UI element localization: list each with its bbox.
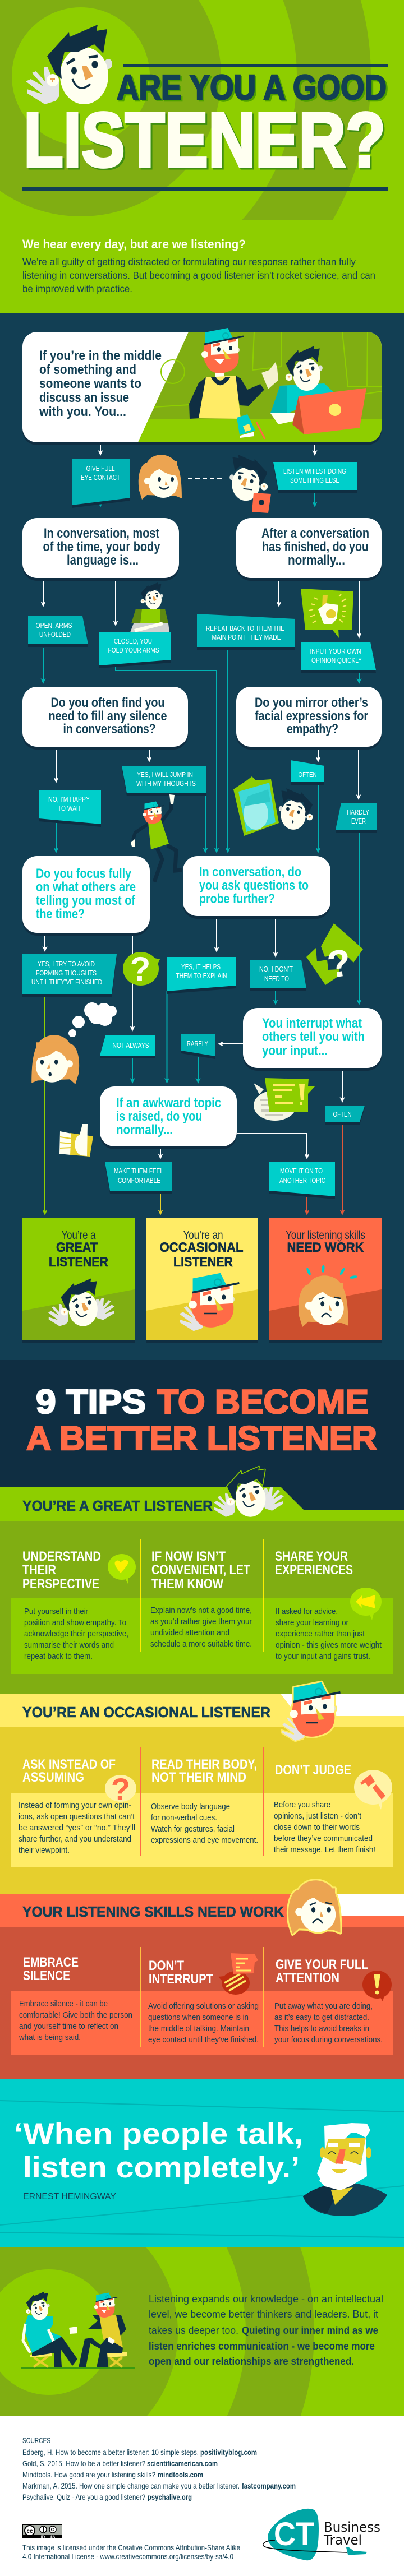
badge: creative commons <box>22 2525 62 2539</box>
tip: don't interrupt: questions when someone is in <box>148 2013 249 2022</box>
icon: interrupting speech bubbles <box>218 1953 258 1995</box>
card: interrupt question <box>243 1008 382 1068</box>
answer: closed, you fold your arms <box>99 632 171 665</box>
tip: ask instead of assuming: ions, ask open questions that can’t <box>19 1812 135 1821</box>
section: sources: Gold, S. 2015. How to be a better listener? <box>22 2459 145 2468</box>
section: sources <box>0 2416 404 2576</box>
card: ask questions to probe: you ask questions to <box>199 878 309 893</box>
section: quote <box>0 2079 404 2247</box>
tip: if now isn't convenient: as you’d rather give them your <box>150 1617 252 1626</box>
answer: not always: NOT ALWAYS <box>112 1041 149 1049</box>
tip: read their body: READ THEIR BODY, <box>152 1757 257 1772</box>
illustration: thinking woman with cloud <box>31 1002 117 1084</box>
tip: understand their perspective: acknowledge their perspective, <box>24 1630 128 1639</box>
illustration: bearded man raising hand <box>131 794 182 882</box>
question text: of something and <box>39 362 136 377</box>
card: body language question: In conversation, most <box>44 526 159 541</box>
icon: question bubble <box>105 1772 136 1807</box>
tip: give your full attention: your focus during conversations. <box>274 2036 383 2045</box>
answer: not always <box>100 1035 155 1056</box>
tip: understand their perspective: Put yourself in their <box>24 1607 88 1616</box>
result card: need work: Your listening skills <box>286 1229 365 1242</box>
section: tips heading: TO BECOME <box>157 1383 369 1421</box>
answer: no, I don't need to: NO, I DON’T <box>259 965 293 973</box>
man seated <box>23 2291 77 2367</box>
card: awkward topic question: normally... <box>116 1122 173 1137</box>
answer: rarely: RARELY <box>187 1039 208 1048</box>
answer: move it on to another topic <box>269 1162 335 1196</box>
closing text: level, we become better thinkers and leaders. But, it <box>149 2309 378 2320</box>
tip: if now isn't convenient: undivided attention and <box>150 1629 229 1638</box>
closing text: open and our relationships are strengthened. <box>149 2356 354 2367</box>
answer: input your own opinion <box>301 642 376 670</box>
intro text: We’re all guilty of getting distracted or formulating our response rather than fully <box>22 256 356 267</box>
answer: closed, you fold your arms: FOLD YOUR ARMS <box>108 646 159 654</box>
answer: yes, I will jump in: YES, I WILL JUMP IN <box>137 770 193 779</box>
tip: share your experiences: If asked for advice, <box>276 1607 338 1616</box>
card: focus fully question <box>22 856 150 933</box>
tip: don't interrupt: the middle of talking. Maintain <box>148 2024 249 2033</box>
icon: worried woman outlined <box>288 1880 341 1934</box>
icon: pointing hand speech bubble <box>301 589 354 638</box>
card: body language question: language is... <box>67 553 139 568</box>
question text <box>39 348 162 419</box>
card: interrupt question: your input... <box>262 1043 328 1058</box>
tip: embrace silence: EMBRACE <box>23 1955 79 1970</box>
tip: don't judge: opinions, just listen - don’t <box>274 1812 361 1821</box>
tip: share your experiences: experience rather than just <box>276 1630 365 1639</box>
card: focus fully question: the time? <box>36 907 85 922</box>
answer: open, arms unfolded <box>28 616 88 644</box>
tip: read their body <box>151 1757 258 1845</box>
answer: move it on to another topic: ANOTHER TOPIC <box>279 1176 325 1185</box>
card: after a conversation question: has finished, do you <box>262 539 369 554</box>
tip: read their body: Watch for gestures, facial <box>151 1825 235 1834</box>
tip: share your experiences <box>275 1549 382 1661</box>
answer: open, arms unfolded: UNFOLDED <box>39 630 71 639</box>
card: mirror expressions question <box>236 687 382 747</box>
section: needs work tips <box>0 1880 404 2079</box>
person: bearded man <box>189 328 278 419</box>
tip: ask instead of assuming: Instead of forming your own opin- <box>19 1801 131 1810</box>
closing text: takes us deeper too. <box>149 2325 238 2336</box>
icon: question bubble: ? <box>111 1772 130 1807</box>
section: sources: scientificamerican.com <box>147 2459 218 2468</box>
tip: if now isn't convenient <box>150 1549 252 1649</box>
badge: creative commons: cc <box>26 2528 33 2535</box>
answer: yes, it helps <box>167 957 236 991</box>
answer: open, arms unfolded: OPEN, ARMS <box>36 621 72 630</box>
answer: repeat back: MAIN POINT THEY MADE <box>212 633 281 641</box>
answer: yes, I try to avoid: UNTIL THEY’VE FINISHED <box>31 978 102 986</box>
card: interrupt question: You interrupt what <box>262 1016 362 1031</box>
answer: yes, I will jump in: WITH MY THOUGHTS <box>136 779 196 788</box>
tip: don't interrupt: eye contact until they’ve finished. <box>148 2036 259 2045</box>
tip: give your full attention: GIVE YOUR FULL <box>276 1957 368 1972</box>
answer: listen whilst doing something else <box>273 462 357 490</box>
bearded man seated <box>69 2292 127 2367</box>
icon: bearded man outlined <box>281 1682 340 1741</box>
answer: input your own opinion: OPINION QUICKLY <box>311 656 362 664</box>
result card: occasional listener: OCCASIONAL <box>159 1240 244 1255</box>
icon: question mark bubble <box>123 950 160 988</box>
answer: no, I don't need to <box>250 960 306 988</box>
card: interrupt question: others tell you with <box>262 1029 365 1044</box>
question text: discuss an issue <box>39 390 129 405</box>
logo: CT Business Travel <box>263 2509 380 2560</box>
badge: creative commons: SA <box>50 2536 56 2539</box>
answer: give full eye contact: EYE CONTACT <box>81 473 120 482</box>
tip: give your full attention: ATTENTION <box>276 1971 339 1986</box>
logo: CT Business Travel: Travel <box>323 2532 362 2548</box>
icon: scattered question mark <box>306 923 363 986</box>
card: fill silence question: Do you often find you <box>50 695 165 710</box>
card: awkward topic question: If an awkward topic <box>116 1095 221 1111</box>
card: ask questions to probe: In conversation, do <box>199 864 301 880</box>
section: sources: mindtools.com <box>158 2470 203 2479</box>
section: sources: Mindtools. How good are your listening skills? <box>22 2470 155 2479</box>
result card: great listener: GREAT <box>56 1240 98 1255</box>
answer: make them feel comfortable: COMFORTABLE <box>118 1176 160 1185</box>
tip: if now isn't convenient: schedule a more suitable time. <box>150 1640 252 1649</box>
connectors: arrows <box>43 443 359 1214</box>
closing text: Listening expands our knowledge - on an intellectual <box>149 2293 383 2305</box>
tip: don't interrupt: DON’T <box>149 1958 184 1973</box>
panel: opening question <box>22 328 382 442</box>
tip: understand their perspective <box>22 1549 128 1661</box>
tip: understand their perspective: summarise their words and <box>24 1641 114 1650</box>
licence text <box>22 2543 240 2561</box>
closing text <box>149 2293 383 2367</box>
answer: no, happy to wait <box>39 790 101 824</box>
answer: rarely <box>181 1034 215 1056</box>
answer: often: OFTEN <box>299 770 316 779</box>
closing text: listen enriches communication - we become more <box>149 2341 375 2352</box>
tip: don't interrupt: INTERRUPT <box>149 1972 213 1987</box>
answer: often (interrupt) <box>325 1106 365 1122</box>
tip: read their body: for non-verbal cues. <box>151 1814 217 1823</box>
tip: ask instead of assuming: be answered “yes” or “no.” They’ll <box>19 1824 135 1833</box>
tip: don't interrupt: Avoid offering solutions or asking <box>148 2002 259 2011</box>
icon: overlapping speech bubbles <box>254 1078 315 1121</box>
question text: with you. You... <box>39 404 126 419</box>
answer: move it on to another topic: MOVE IT ON TO <box>280 1167 323 1175</box>
answer: yes, it helps: YES, IT HELPS <box>181 963 221 971</box>
answer: repeat back <box>197 614 295 647</box>
section: tips heading <box>0 1360 404 1511</box>
card: after a conversation question: normally... <box>288 553 345 568</box>
tip: don't judge: Before you share <box>274 1801 330 1810</box>
answer: hardly ever <box>336 803 377 830</box>
tip: share your experiences: SHARE YOUR <box>275 1549 348 1564</box>
tip: understand their perspective: PERSPECTIVE <box>22 1576 99 1592</box>
answer: often (interrupt): OFTEN <box>333 1110 351 1118</box>
answer: yes, I try to avoid: FORMING THOUGHTS <box>36 969 97 977</box>
tip: share your experiences: share your learning or <box>276 1618 348 1627</box>
card: after a conversation question: After a conversation <box>261 526 369 541</box>
tip: understand their perspective: repeat back to them. <box>24 1652 93 1661</box>
result card: need work: NEED WORK <box>287 1240 364 1255</box>
section: needs work tips: YOUR LISTENING SKILLS NEED WORK <box>22 1903 284 1920</box>
tip: don't judge: DON’T JUDGE <box>275 1763 351 1778</box>
answer: repeat back: REPEAT BACK TO THEM THE <box>206 624 284 632</box>
answer: no, happy to wait: NO, I’M HAPPY <box>48 795 90 803</box>
answer: yes, I try to avoid: YES, I TRY TO AVOID <box>38 960 95 968</box>
tip: read their body: Observe body language <box>151 1802 230 1811</box>
icon: arrow bubble <box>350 1588 382 1620</box>
result card: great listener: You’re a <box>62 1229 96 1242</box>
section: sources: positivityblog.com <box>200 2448 257 2457</box>
tip: embrace silence: and yourself time to reflect on <box>19 2022 118 2031</box>
icon: waving man <box>26 25 112 104</box>
icon: woman smiling <box>139 455 182 500</box>
answer: make them feel comfortable <box>105 1162 172 1191</box>
badge: creative commons: BY <box>41 2536 45 2539</box>
section: sources: SOURCES <box>22 2436 50 2445</box>
card: body language question: of the time, your body <box>43 539 160 554</box>
tip: don't judge: their message. Let them finish! <box>274 1846 375 1854</box>
card: focus fully question: Do you focus fully <box>36 866 132 881</box>
answer: listen whilst doing something else: LISTEN WHILST DOING <box>283 467 346 475</box>
card: mirror expressions question: Do you mirror other’s <box>255 695 368 710</box>
card: awkward topic question: is raised, do you <box>116 1109 202 1124</box>
tip: if now isn't convenient: Explain now’s not a good time, <box>150 1606 252 1615</box>
tip: if now isn't convenient: CONVENIENT, LET <box>152 1562 250 1578</box>
attribution: ERNEST HEMINGWAY <box>23 2192 116 2202</box>
tip: ask instead of assuming: share further, and you understand <box>19 1835 131 1844</box>
icon: question mark bubble: ? <box>130 950 150 988</box>
tip: ask instead of assuming <box>19 1757 135 1855</box>
result card: need work <box>269 1218 382 1340</box>
section: sources: fastcompany.com <box>242 2481 296 2490</box>
portrait: Hemingway <box>303 2123 387 2216</box>
answer: no, I don't need to: NEED TO <box>264 974 289 983</box>
card: focus fully question: on what others are <box>36 880 136 895</box>
card: ask questions to probe: probe further? <box>199 891 275 907</box>
tip: embrace silence: what is being said. <box>19 2033 81 2042</box>
intro text <box>22 237 375 294</box>
tip: ask instead of assuming: ASK INSTEAD OF <box>22 1757 116 1772</box>
tip: if now isn't convenient: IF NOW ISN’T <box>152 1549 226 1564</box>
licence text: 4.0 International License - www.creativecommons.org/licenses/by-sa/4.0 <box>22 2552 233 2561</box>
card: ask questions to probe <box>183 856 330 916</box>
answer: yes, I will jump in <box>122 766 206 793</box>
tip: understand their perspective: UNDERSTAND <box>22 1549 101 1564</box>
closing text: Quieting our inner mind as we <box>242 2325 378 2336</box>
card: focus fully question: telling you most of <box>36 893 136 908</box>
intro text: We hear every day, but are we listening? <box>22 237 246 251</box>
section: sources: Markman, A. 2015. How one simple change can make you a better listener. <box>22 2481 240 2490</box>
answer: often <box>291 760 324 782</box>
tip: don't interrupt <box>148 1958 259 2045</box>
intro text: listening in conversations. But becoming a good listener isn’t rocket science, and can <box>22 270 375 281</box>
answer: no, happy to wait: TO WAIT <box>58 804 81 812</box>
tip: don't judge: before they’ve communicated <box>274 1834 373 1843</box>
tip: ask instead of assuming: ASSUMING <box>22 1770 84 1785</box>
icon: exclamation bubble <box>362 1971 392 2001</box>
tip: give your full attention: as it’s easy to get distracted. <box>274 2013 369 2022</box>
tip: embrace silence: Embrace silence - it can be <box>19 2000 108 2009</box>
icon: man looking into mirror <box>233 776 313 836</box>
tip: embrace silence: SILENCE <box>23 1968 70 1983</box>
person: man at laptop <box>270 346 366 434</box>
answer: give full eye contact: GIVE FULL <box>86 464 114 473</box>
section: sources: Edberg, H. How to become a better listener: 10 simple steps. <box>22 2448 199 2457</box>
licence text: This image is licensed under the Creative Commons Attribution-Share Alike <box>22 2543 240 2552</box>
quote text: ‘When people talk, <box>14 2117 303 2150</box>
quote text: listen completely.’ <box>23 2151 300 2184</box>
illustration: two people sitting <box>21 2291 135 2369</box>
icon: worried woman <box>299 1265 357 1327</box>
section: tips heading: A BETTER LISTENER <box>26 1419 377 1457</box>
section: great listener tips <box>0 1467 404 1694</box>
tip: understand their perspective: THEIR <box>22 1562 56 1578</box>
section: flowchart background <box>0 313 404 1360</box>
result card: occasional listener: LISTENER <box>173 1255 233 1270</box>
section: occasional listener tips: YOU’RE AN OCCASIONAL LISTENER <box>22 1704 270 1721</box>
card: mirror expressions question: empathy? <box>287 722 338 737</box>
icon: man with both hands up <box>48 1278 114 1326</box>
card: fill silence question: need to fill any silence <box>48 709 167 724</box>
tip: give your full attention: Put away what you are doing, <box>274 2002 373 2011</box>
section: occasional listener tips <box>0 1682 404 1894</box>
card: after a conversation question <box>236 518 382 578</box>
tip: don't judge: close down to their words <box>274 1823 360 1832</box>
icon: scattered question mark: ? <box>324 941 354 986</box>
illustration: two people at a table <box>138 332 382 442</box>
result card: great listener: LISTENER <box>49 1255 108 1270</box>
card: fill silence question: in conversations? <box>63 722 156 737</box>
icon: man with hands, outlined <box>214 1467 284 1517</box>
card: awkward topic question <box>100 1086 237 1146</box>
tip: embrace silence: comfortable! Give both the person <box>19 2011 132 2020</box>
tip: embrace silence <box>19 1955 132 2042</box>
answer: hardly ever: EVER <box>351 817 366 825</box>
section: sources: psychalive.org <box>148 2492 192 2501</box>
answer: listen whilst doing something else: SOMETHING ELSE <box>290 476 339 484</box>
tip: don't judge <box>274 1763 375 1854</box>
logo: CT Business Travel: Business <box>324 2519 380 2535</box>
section: header <box>0 0 404 313</box>
tip: read their body: expressions and eye movement. <box>151 1836 258 1845</box>
dashed link <box>188 478 223 479</box>
card: fill silence question <box>22 687 188 747</box>
answer: make them feel comfortable: MAKE THEM FEEL <box>114 1167 163 1175</box>
tip: share your experiences: to your input and gains trust. <box>276 1652 370 1661</box>
answer: yes, I try to avoid <box>22 954 117 994</box>
intro text: be improved with practice. <box>22 283 132 294</box>
icon: man with folded arms <box>130 582 169 632</box>
tip: read their body: NOT THEIR MIND <box>152 1770 246 1785</box>
icon: heart bubble <box>108 1554 136 1584</box>
answer: hardly ever: HARDLY <box>347 808 369 816</box>
logo: CT Business Travel: CT <box>274 2516 314 2552</box>
quote text <box>14 2117 303 2184</box>
answer: yes, it helps: THEM TO EXPLAIN <box>176 972 227 980</box>
answer: input your own opinion: INPUT YOUR OWN <box>310 647 361 655</box>
result card: great listener <box>22 1218 135 1340</box>
section: closing <box>0 2247 404 2416</box>
icon: thumbs up <box>59 1124 93 1157</box>
icon: distracted man with phone <box>229 455 271 513</box>
tip: give your full attention <box>274 1957 383 2045</box>
answer: closed, you fold your arms: CLOSED, YOU <box>114 637 152 645</box>
tip: understand their perspective: position and show empathy. To <box>24 1618 126 1627</box>
section: tips heading: 9 TIPS <box>36 1383 146 1421</box>
icon: gavel bubble <box>354 1770 392 1810</box>
tip: share your experiences: EXPERIENCES <box>275 1562 353 1578</box>
section: sources: Psychalive. Quiz - Are you a good listener? <box>22 2492 145 2501</box>
card: body language question <box>22 518 179 578</box>
result card: occasional listener <box>146 1218 258 1340</box>
answer: give full eye contact <box>72 459 130 505</box>
question text: If you’re in the middle <box>39 348 162 363</box>
tip: if now isn't convenient: THEM KNOW <box>152 1576 223 1592</box>
result card: occasional listener: You’re an <box>183 1229 223 1242</box>
icon: bearded man with hand <box>180 1273 239 1331</box>
tip: share your experiences: opinion - this gives more weight <box>276 1641 382 1650</box>
section: great listener tips: YOU’RE A GREAT LISTENER <box>22 1497 213 1514</box>
tip: give your full attention: This helps to avoid breaks in <box>274 2024 369 2033</box>
question text: someone wants to <box>39 376 141 391</box>
items: notebook and pencil <box>237 414 265 439</box>
card: mirror expressions question: facial expressions for <box>255 709 368 724</box>
tip: ask instead of assuming: their viewpoint. <box>19 1846 70 1855</box>
